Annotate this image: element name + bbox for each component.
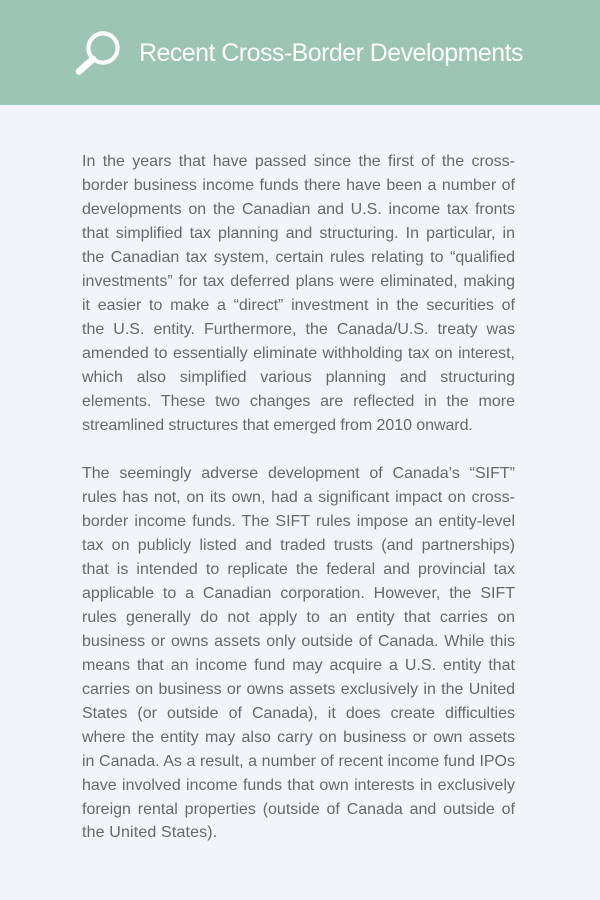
text block: second paragraph: have involved income funds that own interests in exclusively bbox=[82, 777, 515, 794]
text block: second paragraph: rules has not, on its own, had a significant impact on cross- bbox=[82, 489, 515, 506]
text block: second paragraph: foreign rental properties (outside of Canada and outside of bbox=[82, 801, 515, 818]
text block: second paragraph: means that an income fund may acquire a U.S. entity that bbox=[82, 657, 515, 674]
text block: second paragraph: where the entity may also carry on business or own assets bbox=[82, 729, 515, 746]
icon: magnifying glass bbox=[76, 31, 120, 75]
text block: second paragraph: rules generally do not apply to an entity that carries on bbox=[82, 609, 515, 626]
header banner bbox=[0, 0, 600, 105]
text block: second paragraph: border income funds. The SIFT rules impose an entity-level bbox=[82, 513, 515, 530]
text block: first paragraph: In the years that have passed since the first of the cross- bbox=[82, 153, 515, 170]
text block: first paragraph: border business income funds there have been a number of bbox=[82, 177, 515, 194]
text block: first paragraph: the Canadian tax system, certain rules relating to “qualified bbox=[82, 249, 515, 266]
text block: first paragraph: investments” for tax deferred plans were eliminated, making bbox=[82, 273, 515, 290]
text block: first paragraph: the U.S. entity. Furthermore, the Canada/U.S. treaty was bbox=[82, 321, 515, 338]
text block: second paragraph bbox=[82, 465, 515, 841]
text block: first paragraph: amended to essentially eliminate withholding tax on interest, bbox=[82, 345, 515, 362]
text block: first paragraph: streamlined structures that emerged from 2010 onward. bbox=[82, 417, 473, 434]
text block: first paragraph bbox=[82, 153, 515, 434]
text block: second paragraph: States (or outside of Canada), it does create difficulties bbox=[82, 705, 515, 722]
title: Recent Cross-Border Developments bbox=[139, 39, 523, 67]
text block: second paragraph: carries on business or owns assets exclusively in the United bbox=[82, 681, 515, 698]
text block: second paragraph: business or owns assets only outside of Canada. While this bbox=[82, 633, 515, 650]
text block: second paragraph: the United States). bbox=[82, 824, 217, 841]
text block: second paragraph: tax on publicly listed and traded trusts (and partnerships) bbox=[82, 537, 515, 554]
text block: second paragraph: applicable to a Canadian corporation. However, the SIFT bbox=[82, 585, 515, 602]
text block: first paragraph: elements. These two changes are reflected in the more bbox=[82, 393, 515, 410]
text block: first paragraph: which also simplified various planning and structuring bbox=[82, 369, 515, 386]
text block: second paragraph: The seemingly adverse development of Canada’s “SIFT” bbox=[82, 465, 515, 482]
text block: first paragraph: developments on the Canadian and U.S. income tax fronts bbox=[82, 201, 515, 218]
text block: second paragraph: in Canada. As a result, a number of recent income fund IPOs bbox=[82, 753, 515, 770]
text block: first paragraph: it easier to make a “direct” investment in the securities of bbox=[82, 297, 515, 314]
text block: second paragraph: that is intended to replicate the federal and provincial tax bbox=[82, 561, 515, 578]
text block: first paragraph: that simplified tax planning and structuring. In particular, in bbox=[82, 225, 515, 242]
